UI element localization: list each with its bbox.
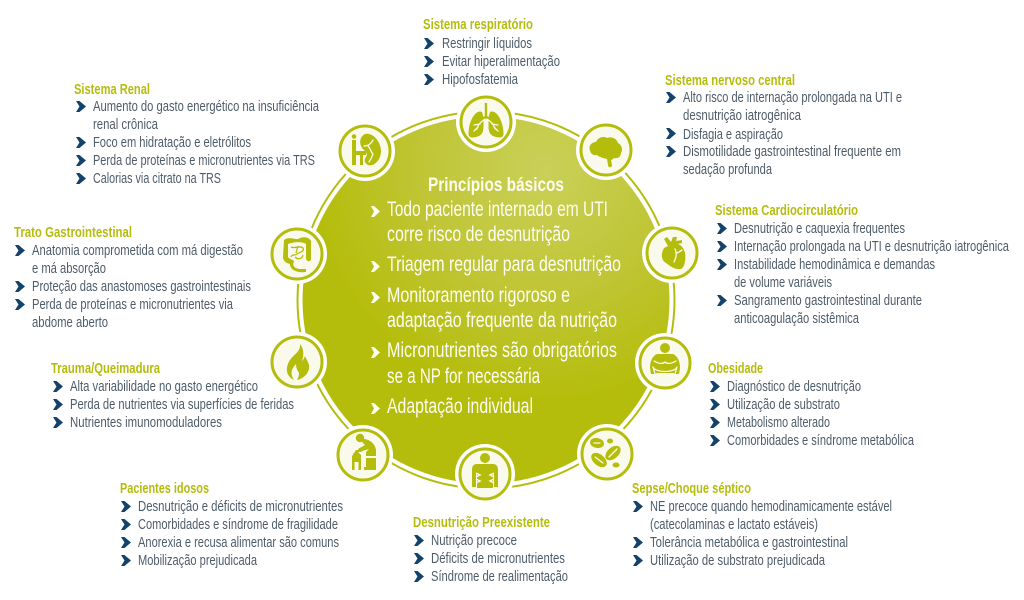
list: principles: Todo paciente internado em UTI — [387, 197, 608, 221]
list: trato gastrointestinal — [15, 243, 251, 331]
list: obesidade: Diagnóstico de desnutrição — [727, 379, 861, 395]
list: trato gastrointestinal: Anatomia comprometida com má digestão — [32, 243, 243, 259]
icon: blood cells — [577, 424, 637, 484]
panel: pacientes idosos — [120, 481, 343, 569]
list: sistema nervoso central: sedação profunda — [683, 162, 773, 178]
heading: trato gastrointestinal: Trato Gastrointestinal — [14, 225, 132, 241]
heading: sistema respiratório: Sistema respiratório — [423, 17, 533, 33]
icon: obese patient — [635, 333, 695, 393]
list: sepse/choque séptico — [633, 499, 892, 569]
list: trato gastrointestinal: Proteção das anastomoses gastrointestinais — [32, 279, 251, 295]
list: sistema cardiocirculatório: de volume variáveis — [734, 275, 832, 291]
list: sepse/choque séptico: (catecolaminas e lactato estáveis) — [650, 517, 818, 533]
list: trauma/queimadura: Nutrientes imunomoduladores — [70, 415, 222, 431]
list: desnutrição preexistente: Nutrição precoce — [431, 533, 517, 549]
heading: sistema cardiocirculatório: Sistema Cardiocirculatório — [715, 203, 858, 219]
list: principles: Triagem regular para desnutrição — [387, 252, 621, 276]
list: principles: corre risco de desnutrição — [387, 222, 570, 246]
list: pacientes idosos: Desnutrição e déficits de micronutrientes — [138, 499, 343, 515]
list: sistema nervoso central: Dismotilidade gastrointestinal frequente em — [683, 144, 901, 160]
list: pacientes idosos — [121, 499, 343, 569]
heading: desnutrição preexistente: Desnutrição Preexistente — [413, 515, 550, 531]
list: sistema renal: Calorias via citrato na TRS — [93, 171, 221, 187]
heading: princípios básicos: Princípios básicos — [428, 175, 564, 196]
panel: obesidade — [708, 361, 915, 449]
list: sistema renal — [76, 99, 320, 187]
heading: trauma/queimadura: Trauma/Queimadura — [51, 361, 161, 377]
list: principles: Adaptação individual — [387, 394, 533, 418]
list: sistema renal: renal crônica — [93, 117, 159, 133]
list: principles: adaptação frequente da nutrição — [387, 308, 617, 332]
panel: sepse/choque séptico — [632, 481, 892, 569]
icon: intestines — [267, 224, 327, 284]
list: sistema nervoso central: desnutrição iatrogênica — [683, 108, 802, 124]
list: desnutrição preexistente: Déficits de micronutrientes — [431, 551, 565, 567]
icon: kidney — [335, 121, 395, 181]
list: sistema cardiocirculatório: Sangramento gastrointestinal durante — [734, 293, 922, 309]
list: sepse/choque séptico: Utilização de substrato prejudicada — [650, 553, 826, 569]
list: trato gastrointestinal: abdome aberto — [32, 315, 108, 331]
list: sistema renal: Aumento do gasto energético na insuficiência — [93, 99, 320, 115]
icon: brain — [576, 120, 636, 180]
list: principles: Micronutrientes são obrigatórios — [387, 338, 617, 362]
list: sistema respiratório: Restringir líquidos — [442, 36, 532, 52]
panel: trauma/queimadura — [51, 361, 294, 431]
list: desnutrição preexistente — [414, 533, 568, 585]
panel: sistema respiratório — [423, 17, 560, 88]
list: trato gastrointestinal: e má absorção — [32, 261, 106, 277]
list: pacientes idosos: Comorbidades e síndrome de fragilidade — [138, 517, 338, 533]
list: principles — [371, 197, 621, 418]
list: obesidade — [710, 379, 915, 449]
list: principles: Monitoramento rigoroso e — [387, 283, 570, 307]
panel: sistema cardiocirculatório — [715, 203, 1010, 327]
list: sistema renal: Foco em hidratação e eletrólitos — [93, 135, 251, 151]
icon: elderly patient with walker — [333, 425, 393, 485]
heading: sepse/choque séptico: Sepse/Choque séptico — [632, 481, 751, 497]
panel: sistema renal — [74, 82, 320, 187]
list: sistema nervoso central: Disfagia e aspiração — [683, 127, 783, 143]
list: sepse/choque séptico: NE precoce quando hemodinamicamente estável — [650, 499, 892, 515]
list: sistema respiratório — [424, 36, 560, 88]
list: sistema cardiocirculatório: anticoagulação sistêmica — [734, 311, 860, 327]
list: sistema renal: Perda de proteínas e micronutrientes via TRS — [93, 153, 315, 169]
list: sistema cardiocirculatório — [717, 221, 1010, 327]
list: principles: se a NP for necessária — [387, 364, 540, 388]
list: sistema cardiocirculatório: Instabilidade hemodinâmica e demandas — [734, 257, 935, 273]
list: obesidade: Metabolismo alterado — [727, 415, 830, 431]
icon: lungs — [456, 92, 516, 152]
list: trauma/queimadura — [53, 379, 294, 431]
heading: pacientes idosos: Pacientes idosos — [120, 481, 209, 497]
list: sistema nervoso central — [666, 90, 902, 178]
icon: heart — [642, 223, 702, 283]
central circle — [298, 112, 674, 488]
list: sistema respiratório: Hipofosfatemia — [442, 72, 519, 88]
icon: torso — [455, 444, 515, 504]
panel: princípios básicos — [371, 175, 621, 418]
list: pacientes idosos: Anorexia e recusa alimentar são comuns — [138, 535, 339, 551]
heading: sistema renal: Sistema Renal — [74, 82, 150, 98]
list: trauma/queimadura: Alta variabilidade no gasto energético — [70, 379, 258, 395]
list: obesidade: Utilização de substrato — [727, 397, 840, 413]
list: trauma/queimadura: Perda de nutrientes via superfícies de feridas — [70, 397, 294, 413]
list: sistema nervoso central: Alto risco de internação prolongada na UTI e — [683, 90, 902, 106]
panel: trato gastrointestinal — [14, 225, 251, 331]
list: desnutrição preexistente: Síndrome de realimentação — [431, 569, 568, 585]
list: trato gastrointestinal: Perda de proteínas e micronutrientes via — [32, 297, 234, 313]
list: obesidade: Comorbidades e síndrome metabólica — [727, 433, 915, 449]
list: pacientes idosos: Mobilização prejudicada — [138, 553, 258, 569]
panel: desnutrição preexistente — [413, 515, 568, 585]
heading: sistema nervoso central: Sistema nervoso central — [665, 73, 795, 89]
list: sistema respiratório: Evitar hiperalimentação — [442, 54, 560, 70]
panel: sistema nervoso central — [665, 73, 902, 178]
list: sepse/choque séptico: Tolerância metabólica e gastrointestinal — [650, 535, 848, 551]
list: sistema cardiocirculatório: Desnutrição e caquexia frequentes — [734, 221, 905, 237]
heading: obesidade: Obesidade — [708, 361, 763, 377]
icon: flame — [267, 332, 327, 392]
